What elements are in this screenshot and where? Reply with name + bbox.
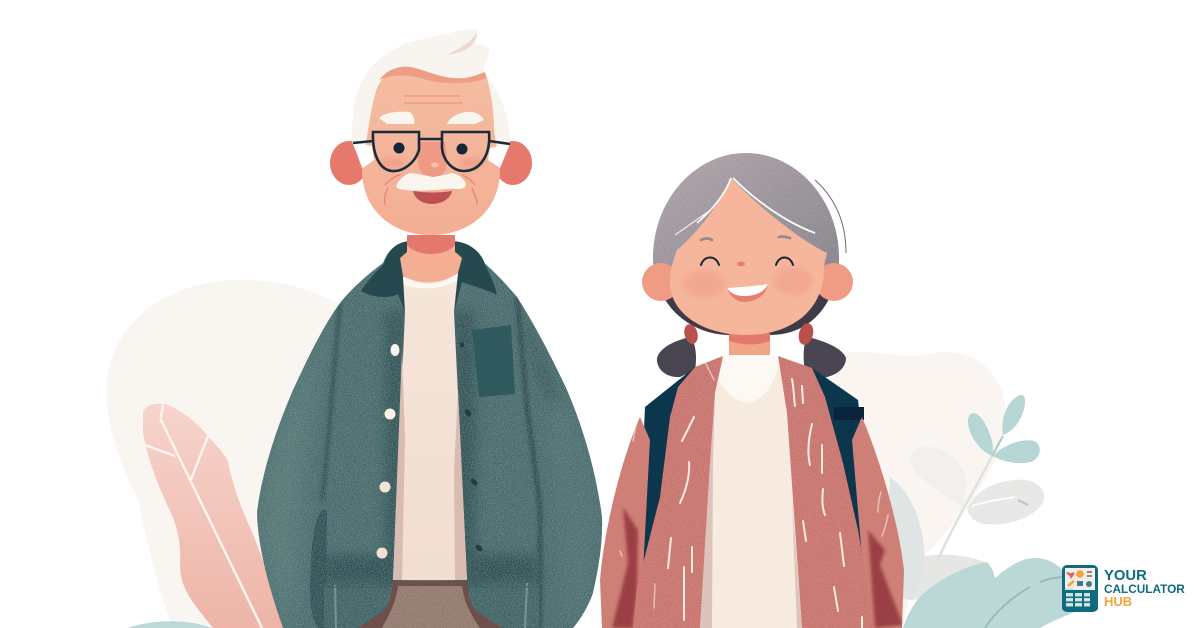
coat sleeves — [598, 415, 906, 628]
backpack straps — [637, 367, 868, 587]
woman face — [670, 178, 827, 335]
man hair back — [352, 29, 510, 168]
under hair — [660, 270, 832, 335]
woman shirt — [700, 360, 802, 628]
stem — [938, 456, 992, 560]
man glasses — [353, 132, 510, 171]
hair tuft shade — [447, 32, 477, 55]
woman ears — [642, 263, 853, 301]
woman eyes — [701, 258, 793, 265]
teal leaf bottom left — [128, 621, 212, 628]
man buttons — [376, 342, 484, 558]
faded plant right — [885, 395, 1044, 600]
man mustache — [396, 173, 466, 191]
man breast pocket — [472, 325, 515, 397]
faded leaf right — [967, 480, 1044, 525]
stray hair strand — [815, 180, 846, 253]
man side hair — [352, 142, 510, 168]
calculator icon — [1062, 566, 1098, 611]
woman figure — [598, 153, 906, 628]
hair ties — [682, 322, 816, 346]
logo — [1062, 566, 1185, 611]
logo wordmark: CALCULATOR — [1104, 582, 1185, 596]
hairline highlights — [697, 178, 815, 233]
man pants — [358, 581, 502, 628]
woman cheeks — [682, 267, 813, 298]
woman mouth — [727, 284, 768, 302]
pink leaf left — [143, 404, 286, 628]
man shirt — [393, 273, 467, 580]
man cheeks — [379, 157, 485, 169]
teal leaf three — [993, 440, 1040, 463]
big teal leaf bottom right — [903, 558, 1078, 628]
pigtails — [657, 338, 846, 378]
man ears — [330, 141, 532, 185]
man face — [362, 67, 500, 235]
faded leaf behind coat — [885, 477, 926, 600]
logo wordmark — [1104, 568, 1185, 609]
man eyes — [394, 142, 468, 154]
woman nose — [737, 262, 745, 266]
logo wordmark: HUB — [1104, 594, 1132, 609]
woman eyebrows — [701, 237, 790, 240]
lower pocket bands — [324, 587, 393, 628]
teal leaf one — [968, 413, 993, 456]
man nose — [418, 142, 447, 177]
logo wordmark: YOUR — [1104, 568, 1147, 584]
woman neck — [729, 333, 770, 355]
man jacket — [250, 240, 610, 628]
background blob right — [830, 352, 1005, 628]
man neck — [400, 235, 462, 282]
man figure — [250, 29, 610, 628]
man collar — [361, 241, 497, 312]
man smile wrinkles — [385, 175, 477, 205]
faded leaf upper — [910, 447, 966, 508]
man forehead wrinkles — [404, 96, 463, 103]
man eyebrows — [379, 112, 484, 124]
man hairline shadow — [379, 67, 486, 83]
man mouth — [413, 191, 452, 204]
background blob left — [107, 280, 340, 628]
teal leaf two — [1002, 395, 1025, 435]
coat front panels — [633, 356, 873, 628]
coat stitches — [620, 362, 888, 628]
turtleneck — [718, 355, 778, 403]
woman hair — [653, 153, 839, 275]
